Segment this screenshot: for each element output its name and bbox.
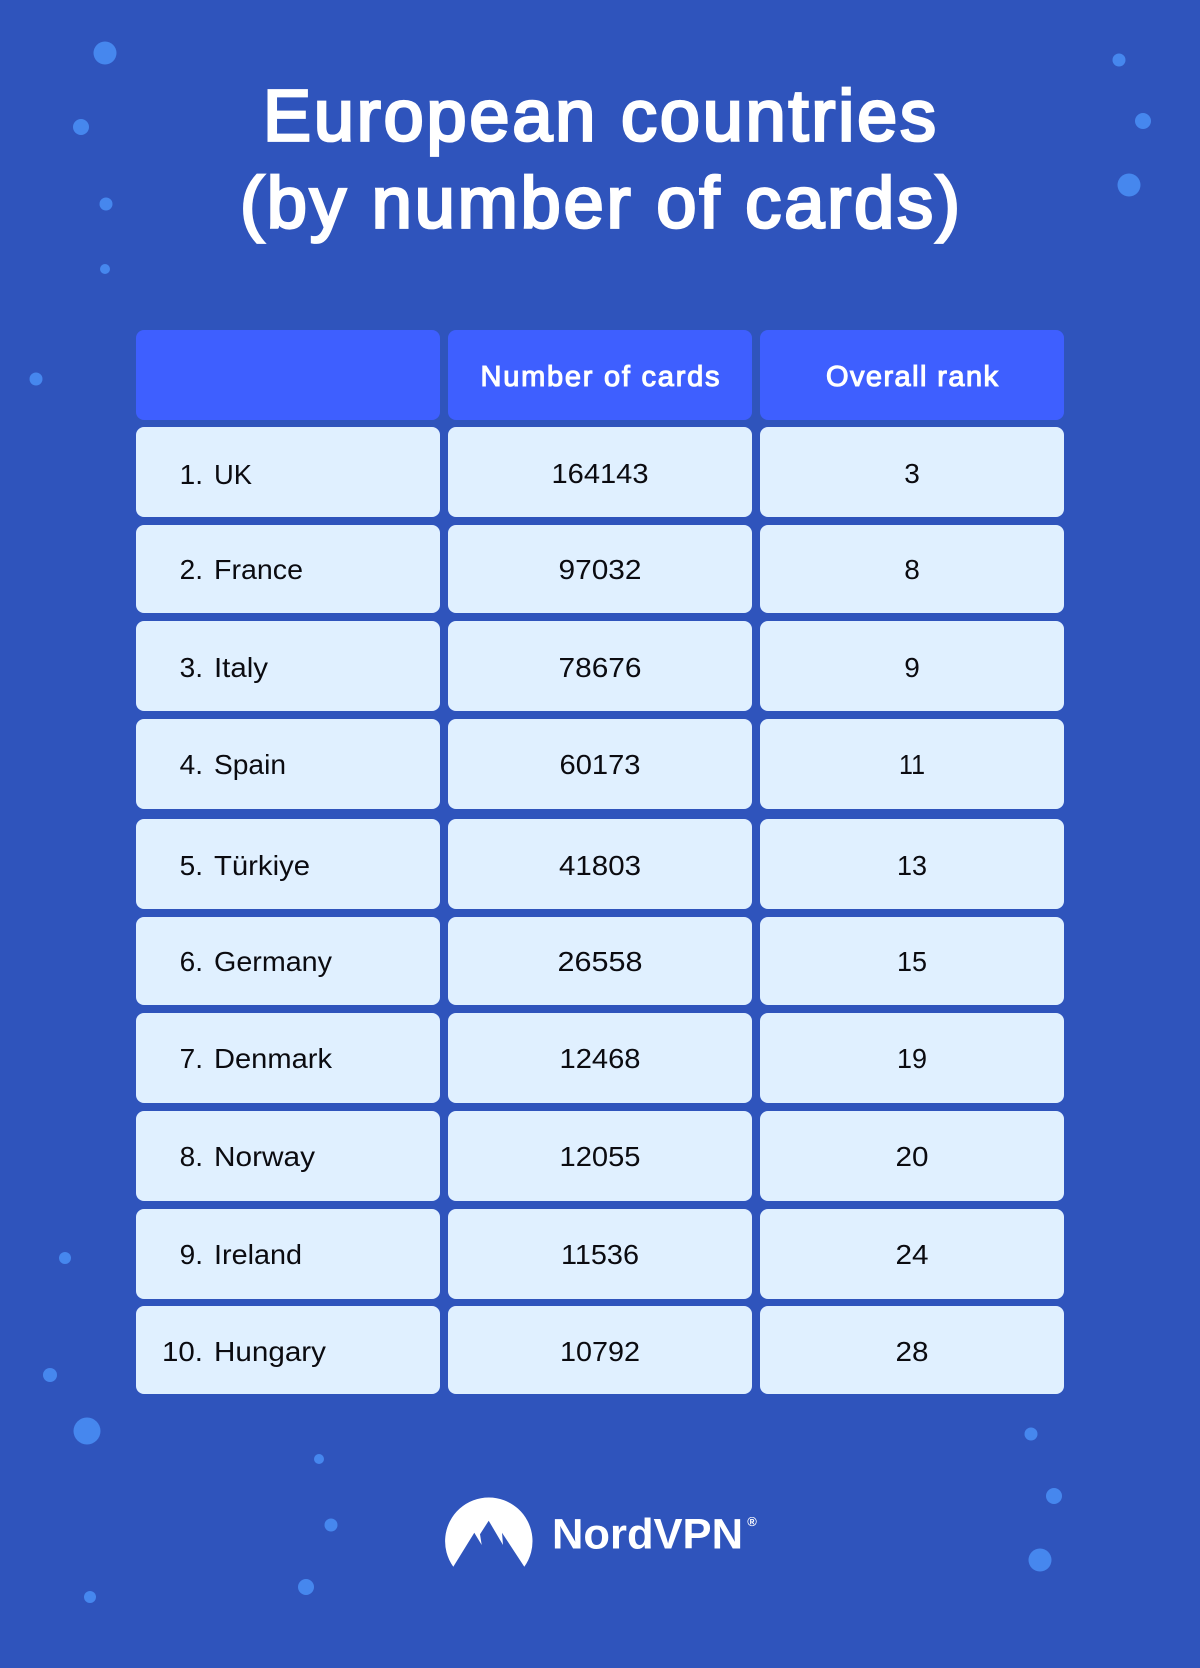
row 10: Hungary: 28 [896,1336,928,1367]
row 4: Spain: 60173 [560,749,640,780]
row 7: Denmark: 19 [897,1043,927,1074]
row 9: Ireland: Ireland [214,1239,302,1270]
row 4: Spain: Spain [214,749,286,780]
row 9: Ireland: 11536 [561,1239,639,1270]
row 1: UK: 3 [904,458,920,489]
decorative dots: bottom left [43,1252,338,1603]
decorative dots: top left [30,42,116,386]
table header row: Number of cards [480,361,720,393]
row 3: Italy: Italy [214,652,268,683]
table header row: Overall rank [826,361,998,393]
row 2: France: France [214,554,303,585]
decorative dots: top right [1112,54,1151,196]
row 1: UK: 164143 [552,458,648,489]
row 8: Norway: 20 [896,1141,928,1172]
row 8: Norway: Norway [214,1141,315,1172]
row 7: Denmark: 12468 [560,1043,640,1074]
row 7: Denmark: 7. [180,1043,203,1074]
registered mark: ® [747,1514,757,1529]
row 7: Denmark: Denmark [214,1043,333,1074]
row 8: Norway: 8. [180,1141,203,1172]
row 5: Türkiye: 5. [180,850,203,881]
decorative dots: bottom right [1024,1428,1062,1572]
row 8: Norway: 12055 [560,1141,640,1172]
row 6: Germany: 6. [180,946,203,977]
wordmark: NordVPN [552,1510,743,1558]
row 7: Denmark [136,1013,1064,1103]
row 10: Hungary: Hungary [214,1336,326,1367]
row 2: France: 97032 [558,554,642,585]
table header row [136,330,1064,420]
row 10: Hungary [136,1306,1064,1394]
row 4: Spain: 4. [180,749,203,780]
row 9: Ireland [136,1209,1064,1299]
row 5: Türkiye: 13 [897,850,927,881]
row 10: Hungary: 10. [162,1336,203,1367]
logo: NordVPN [445,1498,757,1567]
row 9: Ireland: 24 [896,1239,928,1270]
row 3: Italy: 9 [904,652,920,683]
row 6: Germany: 15 [897,946,927,977]
row 6: Germany: 26558 [558,946,642,977]
title: (by number of cards) [240,164,960,244]
row 4: Spain [136,719,1064,809]
row 10: Hungary: 10792 [560,1336,640,1367]
row 8: Norway [136,1111,1064,1201]
row 4: Spain: 11 [899,749,925,780]
row 3: Italy [136,621,1064,711]
row 9: Ireland: 9. [180,1239,203,1270]
row 6: Germany [136,917,1064,1005]
row 5: Türkiye [136,819,1064,909]
table [136,330,1064,1394]
title [240,76,960,244]
row 1: UK: UK [214,459,252,490]
row 2: France [136,525,1064,613]
row 5: Türkiye: Türkiye [214,850,310,881]
row 5: Türkiye: 41803 [559,850,641,881]
row 2: France: 2. [180,554,203,585]
row 3: Italy: 78676 [558,652,642,683]
icon: mountain [445,1498,532,1567]
row 1: UK [136,427,1064,517]
row 6: Germany: Germany [214,946,332,977]
row 3: Italy: 3. [180,652,203,683]
row 1: UK: 1. [180,459,203,490]
row 2: France: 8 [904,554,920,585]
title: European countries [263,76,936,156]
